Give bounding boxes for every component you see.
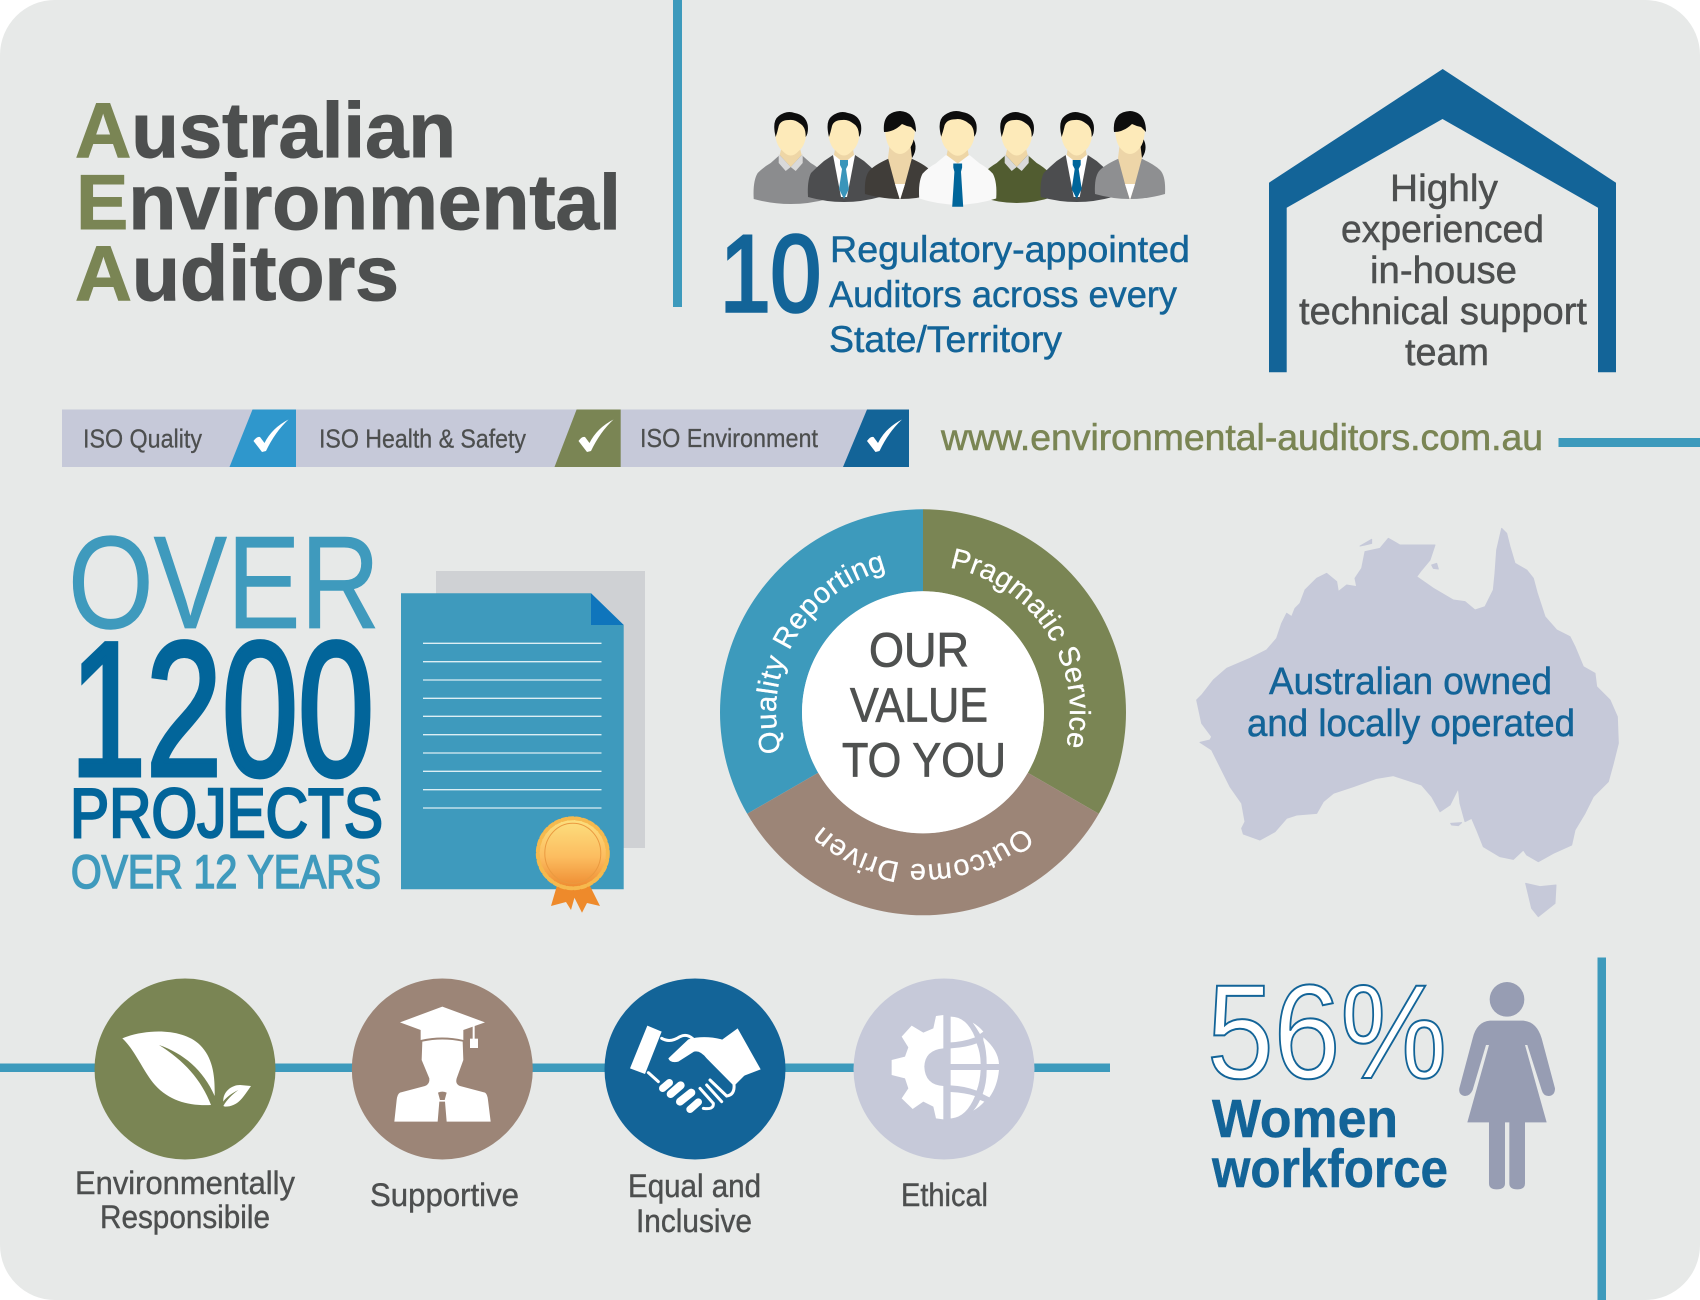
seal ribbons [551,882,600,913]
person 6: suit with dark blue tie [1040,112,1113,202]
ring label: quality reporting: Quality Reporting [756,555,885,753]
person 5: green vest [980,112,1053,203]
icon: Australia map [1197,528,1618,917]
ring centre text [842,625,1006,788]
segment: pragmatic service [923,509,1126,814]
number 10: 10 [720,213,821,335]
house text: technical support [1299,291,1587,333]
icon: group of seven auditors [754,111,1165,207]
icon: house outline [1269,69,1616,372]
person 1: grey sweater [754,112,828,204]
document text lines [423,643,602,808]
value: ethical [854,978,1034,1213]
auditors description: Auditors across every [829,274,1177,315]
ISO Environment [640,410,909,467]
label: Equal and [628,1168,761,1204]
ISO Quality [83,410,296,467]
value: supportive [352,978,533,1213]
value ring [720,509,1126,916]
ISO Health and Safety: ISO Health & Safety [319,424,526,454]
stat: over 1200 projects over 12 years [68,509,383,898]
icon: handshake [630,1026,761,1109]
top vertical divider [673,0,682,307]
icon: graduate [394,1007,491,1122]
icon: certificate document [401,571,645,913]
ISO Environment: ISO Environment [640,423,819,453]
front sheet [401,593,624,889]
ring centre text: OUR [869,625,969,678]
map caption: Australian owned [1269,661,1552,703]
person 2: suit with light blue tie [808,112,880,202]
person 7: woman in grey jacket [1095,111,1165,200]
icon: woman figure [1459,982,1555,1189]
person 3: woman in dark jacket [865,111,935,200]
house text: Highly [1390,168,1498,210]
label: Ethical [901,1177,988,1213]
ISO certification bar [62,410,909,467]
women workforce label [1211,1089,1448,1199]
stat: 56% women workforce [1207,958,1448,1199]
ring label: pragmatic service: Pragmatic Service [952,548,1092,748]
house outline with in-house team text [1269,69,1616,374]
value: equal and inclusive [604,978,786,1239]
house text [1299,168,1587,374]
label [628,1168,761,1239]
value: environmentally responsible [75,978,295,1235]
stat: over 1200 projects over 12 years: PROJECTS [70,774,383,852]
folded corner [591,593,624,625]
ring centre [802,591,1044,833]
women workforce label: workforce [1211,1139,1448,1199]
segment: quality reporting [720,509,923,814]
house text: experienced [1341,209,1544,251]
ISO Health and Safety [319,410,621,467]
stat: over 1200 projects over 12 years: OVER [68,509,380,656]
map of Australia with caption [1197,528,1618,917]
bottom connector line [0,1064,1110,1072]
label: Responsibile [100,1199,270,1235]
number 56%: 56% [1207,958,1447,1107]
stat: 10 regulatory-appointed auditors [720,213,1190,360]
ISO Quality: ISO Quality [83,424,202,454]
stat: over 1200 projects over 12 years: OVER 12 YEARS [71,845,381,898]
segment: outcome driven [747,773,1099,915]
website url: www.environmental-auditors.com.au [940,417,1543,458]
back sheet [436,571,645,848]
women workforce label: Women [1212,1089,1398,1149]
ring centre text: VALUE [850,680,988,733]
auditors description: State/Territory [829,319,1063,360]
ring label: outcome driven: Outcome Driven [815,826,1032,882]
ring centre text: TO YOU [842,735,1006,788]
person 4: centre, white shirt [919,111,996,207]
title [75,86,621,317]
url rule [1558,438,1700,447]
label: Environmentally [75,1165,295,1201]
map caption: and locally operated [1247,703,1575,745]
label [75,1165,295,1235]
seal rosette [538,818,608,888]
bottom right vertical divider [1598,958,1606,1300]
icon: leaves [122,1032,251,1107]
icon: gear and globe [892,1015,999,1119]
title: Auditors [75,229,399,317]
house text: team [1405,332,1489,374]
house text: in-house [1370,250,1517,292]
auditors description [829,229,1190,360]
label: Supportive [370,1177,519,1213]
label: Inclusive [636,1203,752,1239]
title: Australian [75,86,456,174]
stat: over 1200 projects over 12 years: 1200 [70,603,374,816]
map caption [1247,661,1575,745]
auditors description: Regulatory-appointed [830,229,1190,270]
title: Environmental [76,158,621,246]
